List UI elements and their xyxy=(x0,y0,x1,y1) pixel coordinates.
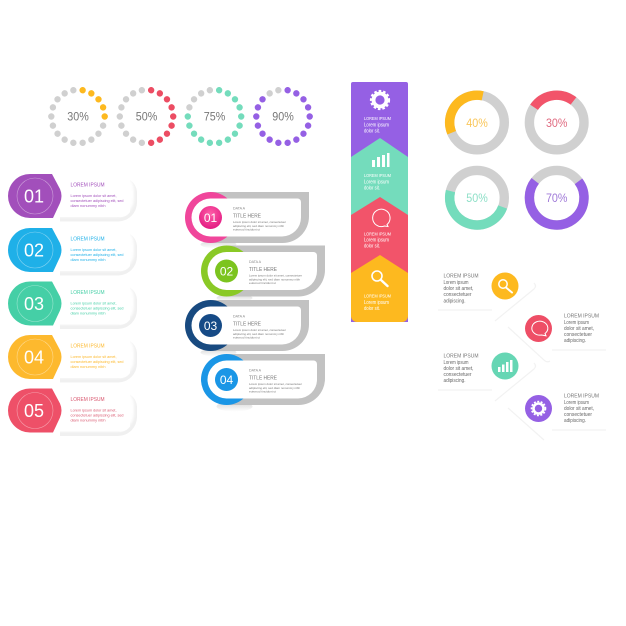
donut chart: 70% xyxy=(518,159,595,236)
zigzag step 4: gear: LOREM IPSUM xyxy=(564,394,599,400)
numbered list item 04: diam nonummy nibh xyxy=(70,365,106,369)
purple segment: dolor sit. xyxy=(364,128,380,134)
dot ring: 50%: 50% xyxy=(136,112,157,124)
purple segment: Lorem ipsum xyxy=(364,122,389,128)
zigzag step 2: speech: LOREM IPSUM xyxy=(564,314,599,320)
numbered list item 04: LOREM IPSUM xyxy=(70,344,104,350)
vertical chevron column xyxy=(351,82,408,322)
pill item 04: adipiscing elit, sed diam nonummy nibh xyxy=(249,386,300,390)
pill item 01: 01 xyxy=(204,211,217,225)
zigzag step 1: search: dolor sit amet, xyxy=(444,286,474,292)
zigzag step 4: gear xyxy=(508,394,606,440)
numbered list item 05: Lorem ipsum dolor sit amet, xyxy=(70,408,116,412)
dot ring: 30%: 30% xyxy=(67,112,89,124)
zigzag step 2: speech: consectetuer xyxy=(564,332,592,338)
pill item 02: DATA A xyxy=(249,260,262,264)
pill item 01: TITLE HERE xyxy=(233,214,261,220)
pill item 04: euismod tincidunt ut xyxy=(249,390,276,394)
red segment xyxy=(351,197,408,295)
numbered list item 03: LOREM IPSUM xyxy=(70,290,104,296)
numbered list item 03: consectetuer adipiscing elit, sed xyxy=(70,306,124,310)
zigzag step 4: gear: Lorem ipsum xyxy=(564,400,589,406)
zigzag step 4: gear: consectetuer xyxy=(564,412,592,418)
donut chart: 30%: 30% xyxy=(546,118,567,130)
zigzag step 3: chart: dolor sit amet, xyxy=(444,366,474,372)
numbered list item 02: 02 xyxy=(24,240,44,260)
numbered list item 03 xyxy=(8,282,137,329)
numbered list item 02 xyxy=(8,228,137,276)
pill item 02: euismod tincidunt ut xyxy=(249,281,276,285)
dot ring: 50% xyxy=(117,86,176,147)
donut chart: 30% xyxy=(519,85,595,160)
pill item 03: euismod tincidunt ut xyxy=(233,336,260,340)
purple segment xyxy=(351,82,408,322)
numbered list item 02: Lorem ipsum dolor sit amet, xyxy=(70,248,116,252)
red segment: dolor sit. xyxy=(364,244,380,250)
pill item 03: adipiscing elit, sed diam nonummy nibh xyxy=(233,332,284,336)
zigzag step 2: speech xyxy=(508,314,606,362)
donut chart: 50%: 50% xyxy=(466,193,488,205)
pill item 04: 04 xyxy=(220,373,233,387)
dot ring: 30% xyxy=(48,86,108,147)
pill item 02 xyxy=(201,246,325,302)
numbered list item 04 xyxy=(8,335,137,382)
zigzag step 4: gear: dolor sit amet, xyxy=(564,406,594,412)
zigzag step 4: gear: adipiscing. xyxy=(564,418,586,424)
numbered list item 01: consectetuer adipiscing elit, sed xyxy=(70,199,124,203)
dot ring: 75% xyxy=(185,86,244,147)
zigzag step 1: search: Lorem ipsum xyxy=(444,280,468,286)
zigzag step 1: search: LOREM IPSUM xyxy=(444,274,479,280)
numbered list item 01: LOREM IPSUM xyxy=(70,182,104,188)
numbered list item 03: Lorem ipsum dolor sit amet, xyxy=(70,302,116,306)
numbered list item 02: diam nonummy nibh xyxy=(70,258,106,262)
pill item 02: adipiscing elit, sed diam nonummy nibh xyxy=(249,277,300,281)
yellow segment: LOREM IPSUM xyxy=(364,294,391,298)
numbered list item 03: 03 xyxy=(24,294,44,314)
dot ring: 90% xyxy=(253,86,313,147)
numbered list item 01: Lorem ipsum dolor sit amet, xyxy=(70,194,116,198)
numbered list item 02: consectetuer adipiscing elit, sed xyxy=(70,253,124,257)
pill item 01: euismod tincidunt ut xyxy=(233,228,260,232)
pill item 02: TITLE HERE xyxy=(249,267,277,273)
pill item 04: DATA A xyxy=(249,368,262,372)
pill item 01: DATA A xyxy=(233,206,246,210)
numbered list item 05 xyxy=(8,388,137,436)
numbered list item 05: 05 xyxy=(24,401,44,421)
pill item 03: Lorem ipsum dolor sit amet, consectetuer xyxy=(233,328,286,332)
numbered list item 05: diam nonummy nibh xyxy=(70,418,106,422)
zigzag step 2: speech: adipiscing. xyxy=(564,338,586,344)
pill item 04: Lorem ipsum dolor sit amet, consectetuer xyxy=(249,382,302,386)
numbered list item 01: 01 xyxy=(24,186,44,206)
pill item 04: TITLE HERE xyxy=(249,376,277,382)
zigzag step 3: chart xyxy=(438,352,536,401)
pill item 03: DATA A xyxy=(233,314,246,318)
teal segment: LOREM IPSUM xyxy=(364,173,391,178)
numbered list item 01: diam nonummy nibh xyxy=(70,204,106,208)
teal segment xyxy=(351,138,408,240)
numbered list item 05: consectetuer adipiscing elit, sed xyxy=(70,414,124,418)
dot ring: 90%: 90% xyxy=(272,112,294,124)
numbered list item 04: Lorem ipsum dolor sit amet, xyxy=(70,355,116,359)
dot ring: 75%: 75% xyxy=(204,112,225,124)
pill item 01: Lorem ipsum dolor sit amet, consectetuer xyxy=(233,220,286,224)
zigzag step 3: chart: Lorem ipsum xyxy=(444,360,468,366)
numbered list item 04: 04 xyxy=(24,348,44,368)
numbered list item 04: consectetuer adipiscing elit, sed xyxy=(70,360,124,364)
red segment: Lorem ipsum xyxy=(364,238,389,244)
red segment: LOREM IPSUM xyxy=(364,232,391,236)
yellow segment: dolor sit. xyxy=(364,306,380,312)
pill item 04 xyxy=(201,354,325,412)
pill item 03: 03 xyxy=(204,319,217,333)
pill item 02: 02 xyxy=(220,264,233,278)
donut chart: 70%: 70% xyxy=(546,193,567,205)
teal segment: dolor sit. xyxy=(364,186,380,192)
zigzag step 1: search: adipiscing. xyxy=(444,298,466,304)
zigzag step 1: search xyxy=(438,272,536,321)
pill item 01: adipiscing elit, sed diam nonummy nibh xyxy=(233,224,284,228)
yellow segment xyxy=(351,255,408,322)
pill item 01 xyxy=(185,192,309,248)
zigzag step 1: search: consectetuer xyxy=(444,292,472,298)
pill item 03: TITLE HERE xyxy=(233,322,261,328)
purple segment: LOREM IPSUM xyxy=(364,116,391,121)
zigzag step 3: chart: consectetuer xyxy=(444,372,472,378)
numbered list item 05: LOREM IPSUM xyxy=(70,397,104,403)
zigzag step 3: chart: adipiscing. xyxy=(444,378,466,384)
donut chart: 50% xyxy=(442,163,512,233)
zigzag step 2: speech: Lorem ipsum xyxy=(564,320,589,326)
numbered list item 03: diam nonummy nibh xyxy=(70,312,106,316)
numbered list item 02: LOREM IPSUM xyxy=(70,236,104,242)
zigzag step 2: speech: dolor sit amet, xyxy=(564,326,594,332)
numbered list item 01 xyxy=(8,174,137,222)
teal segment: Lorem ipsum xyxy=(364,180,389,186)
pill item 02: Lorem ipsum dolor sit amet, consectetuer xyxy=(249,274,302,278)
donut chart: 40% xyxy=(441,87,513,158)
pill item 03 xyxy=(185,300,309,356)
zigzag step 3: chart: LOREM IPSUM xyxy=(444,354,479,360)
yellow segment: Lorem ipsum xyxy=(364,300,389,306)
donut chart: 40%: 40% xyxy=(466,118,488,130)
